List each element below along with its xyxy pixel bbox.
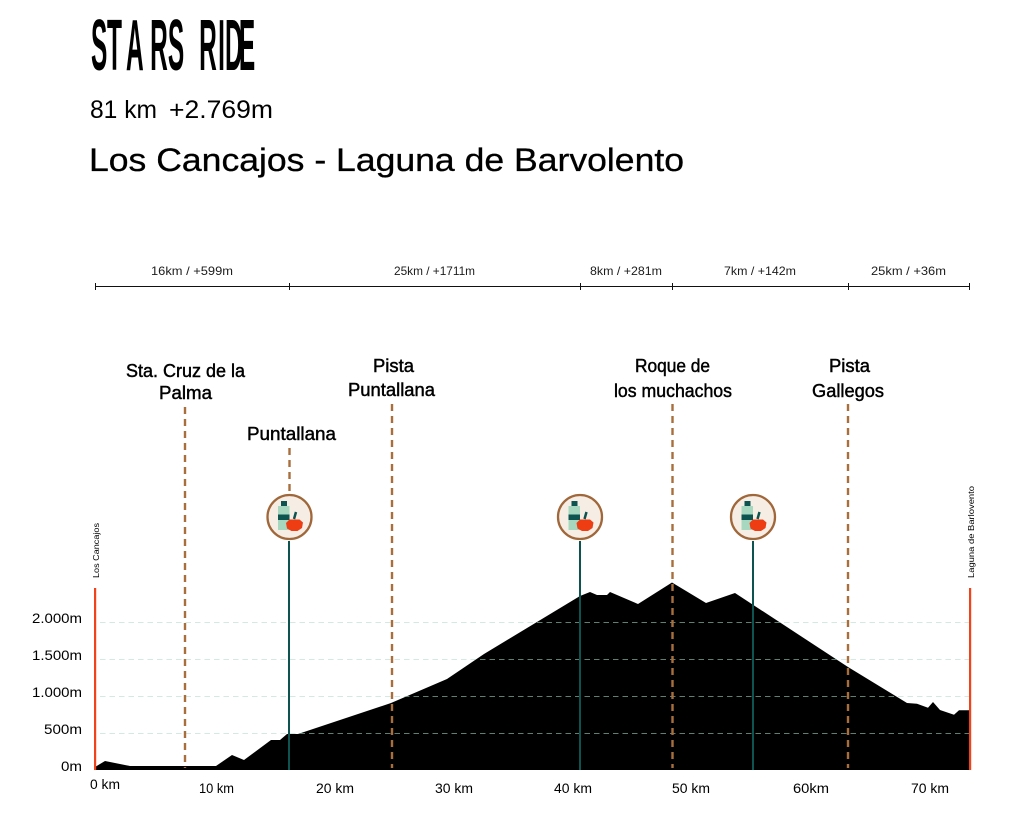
distance axis labels: 70 km: [911, 781, 949, 796]
elevation axis labels: [32, 610, 82, 774]
place marker: Sta. Cruz de la Palma: [126, 361, 246, 768]
distance axis labels: 20 km: [316, 781, 354, 796]
place marker: Pista Gallegos: Gallegos: [812, 381, 884, 401]
elevation axis labels: 2.000m: [32, 610, 82, 626]
segment label 4: 7km / +142m: [724, 264, 796, 278]
place marker: Sta. Cruz de la Palma: Palma: [159, 383, 213, 403]
feed station line 2: [579, 541, 581, 770]
place marker: Roque de los muchachos: Roque de: [635, 356, 710, 376]
elevation grid lines: [100, 622, 969, 734]
feed station line 1: [288, 541, 290, 770]
elevation axis labels: 1.000m: [32, 684, 82, 700]
elevation profile: [95, 582, 969, 770]
finish marker: Laguna de Barlovento: Laguna de Barlovento: [966, 486, 976, 578]
place marker: Pista Gallegos: [812, 356, 884, 768]
elevation axis labels: 1.500m: [32, 647, 82, 663]
route name: Los Cancajos - Laguna de Barvolento: [89, 142, 684, 178]
place marker: Sta. Cruz de la Palma: Sta. Cruz de la: [126, 361, 246, 381]
distance axis labels: 50 km: [672, 781, 710, 796]
segment label 2: 25km / +1711m: [394, 264, 475, 278]
start marker: Los Cancajos: Los Cancajos: [91, 523, 101, 578]
place marker: Pista Gallegos: Pista: [829, 356, 871, 376]
place marker: Puntallana: Puntallana: [247, 424, 337, 444]
title: STARS RIDE: [91, 6, 255, 86]
place marker: Pista Puntallana: Puntallana: [348, 380, 436, 400]
icon: feed station 3: [731, 495, 775, 539]
segment scale bar: [96, 264, 970, 290]
icon: feed station 2: [558, 495, 602, 539]
distance axis labels: 10 km: [199, 781, 234, 796]
icon: feed station 1: [268, 495, 312, 539]
distance axis labels: 60km: [793, 781, 829, 796]
distance and elevation summary: [90, 96, 273, 124]
elevation axis labels: 0m: [61, 758, 82, 774]
distance axis labels: 40 km: [554, 781, 592, 796]
distance axis labels: [90, 777, 949, 796]
feed station line 3: [752, 541, 754, 770]
place marker: Roque de los muchachos: los muchachos: [614, 381, 732, 401]
distance axis labels: 30 km: [435, 781, 473, 796]
segment label 5: 25km / +36m: [871, 264, 946, 278]
place marker: Roque de los muchachos: [614, 356, 732, 768]
distance and elevation summary: +2.769m: [169, 96, 273, 124]
elevation axis labels: 500m: [44, 721, 82, 737]
segment label 3: 8km / +281m: [590, 264, 662, 278]
distance axis labels: 0 km: [90, 777, 120, 792]
segment label 1: 16km / +599m: [151, 264, 233, 278]
grid lines over profile: [300, 622, 969, 734]
place marker: Pista Puntallana: Pista: [373, 356, 415, 376]
place marker: Puntallana: [247, 424, 337, 494]
distance and elevation summary: 81 km: [90, 96, 157, 124]
place marker: Pista Puntallana: [348, 356, 436, 768]
